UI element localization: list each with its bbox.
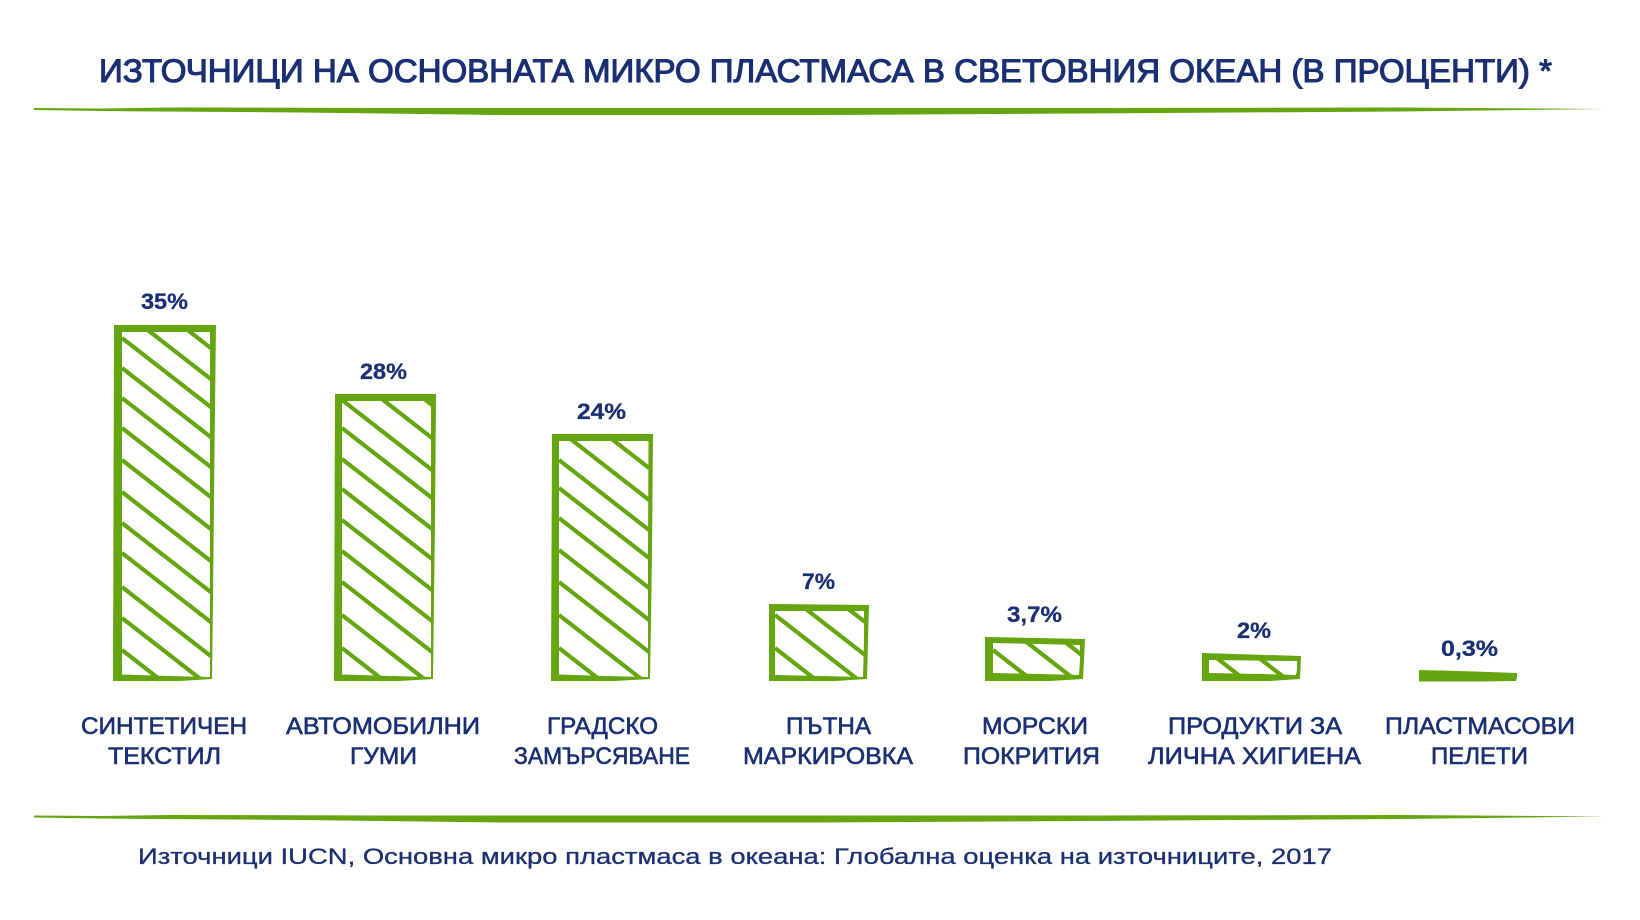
category label: car tyres: АВТОМОБИЛНИ <box>286 713 480 740</box>
value label: 28%: 28% <box>360 359 407 384</box>
category label: synthetic textile <box>81 713 247 770</box>
category label: car tyres: ГУМИ <box>350 743 417 770</box>
bar: 28% <box>334 394 436 681</box>
category label: personal care products <box>1148 713 1361 770</box>
category label: urban pollution <box>514 713 690 770</box>
category label: car tyres <box>286 713 480 770</box>
value label: 0,3%: 0,3% <box>1441 636 1498 661</box>
bar group: car tyres 28% <box>286 335 480 770</box>
bar group: road markings 7% <box>744 573 914 764</box>
category label: marine coatings: ПОКРИТИЯ <box>963 743 1100 770</box>
bar: 24% <box>551 434 653 681</box>
bar group: plastic pellets 0,3% <box>1385 636 1575 770</box>
category label: personal care products: ПРОДУКТИ ЗА <box>1168 713 1342 740</box>
value label: 35%: 35% <box>141 289 188 314</box>
category label: urban pollution: ГРАДСКО <box>547 713 658 740</box>
value label: 7%: 7% <box>802 569 835 594</box>
value label: 3,7%: 3,7% <box>1007 602 1062 627</box>
bar group: synthetic textile 35% <box>81 279 247 770</box>
category label: plastic pellets: ПЕЛЕТИ <box>1431 743 1528 770</box>
category label: plastic pellets <box>1385 713 1575 770</box>
value label: 2%: 2% <box>1237 618 1271 643</box>
source note: Източници IUCN, Основна микро пластмаса в океана: Глобална оценка на източниците, 2017 <box>138 844 1332 869</box>
category label: marine coatings <box>963 713 1100 770</box>
bar group: urban pollution 24% <box>514 398 690 770</box>
bar chart <box>81 279 1575 770</box>
category label: marine coatings: МОРСКИ <box>982 713 1088 740</box>
bar: 0,3% <box>1419 670 1517 682</box>
bar: 35% <box>113 325 216 681</box>
value label: 24%: 24% <box>577 399 626 424</box>
category label: personal care products: ЛИЧНА ХИГИЕНА <box>1148 743 1361 770</box>
bar group: marine coatings 3,7% <box>964 606 1098 764</box>
category label: urban pollution: ЗАМЪРСЯВАНЕ <box>514 743 690 770</box>
category label: road markings: МАРКИРОВКА <box>743 743 913 770</box>
bar: 7% <box>769 604 869 681</box>
bar group: personal care products 2% <box>1148 618 1361 770</box>
category label: plastic pellets: ПЛАСТМАСОВИ <box>1385 713 1575 740</box>
category label: road markings <box>743 713 913 770</box>
title: ИЗТОЧНИЦИ НА ОСНОВНАТА МИКРО ПЛАСТМАСА В СВЕТОВНИЯ ОКЕАН (В ПРОЦЕНТИ) * <box>99 53 1552 89</box>
category label: synthetic textile: ТЕКСТИЛ <box>108 743 221 770</box>
bar: 3,7% <box>985 637 1085 681</box>
category label: synthetic textile: СИНТЕТИЧЕН <box>81 713 247 740</box>
bar: 2% <box>1202 653 1301 681</box>
category label: road markings: ПЪТНА <box>786 713 871 740</box>
